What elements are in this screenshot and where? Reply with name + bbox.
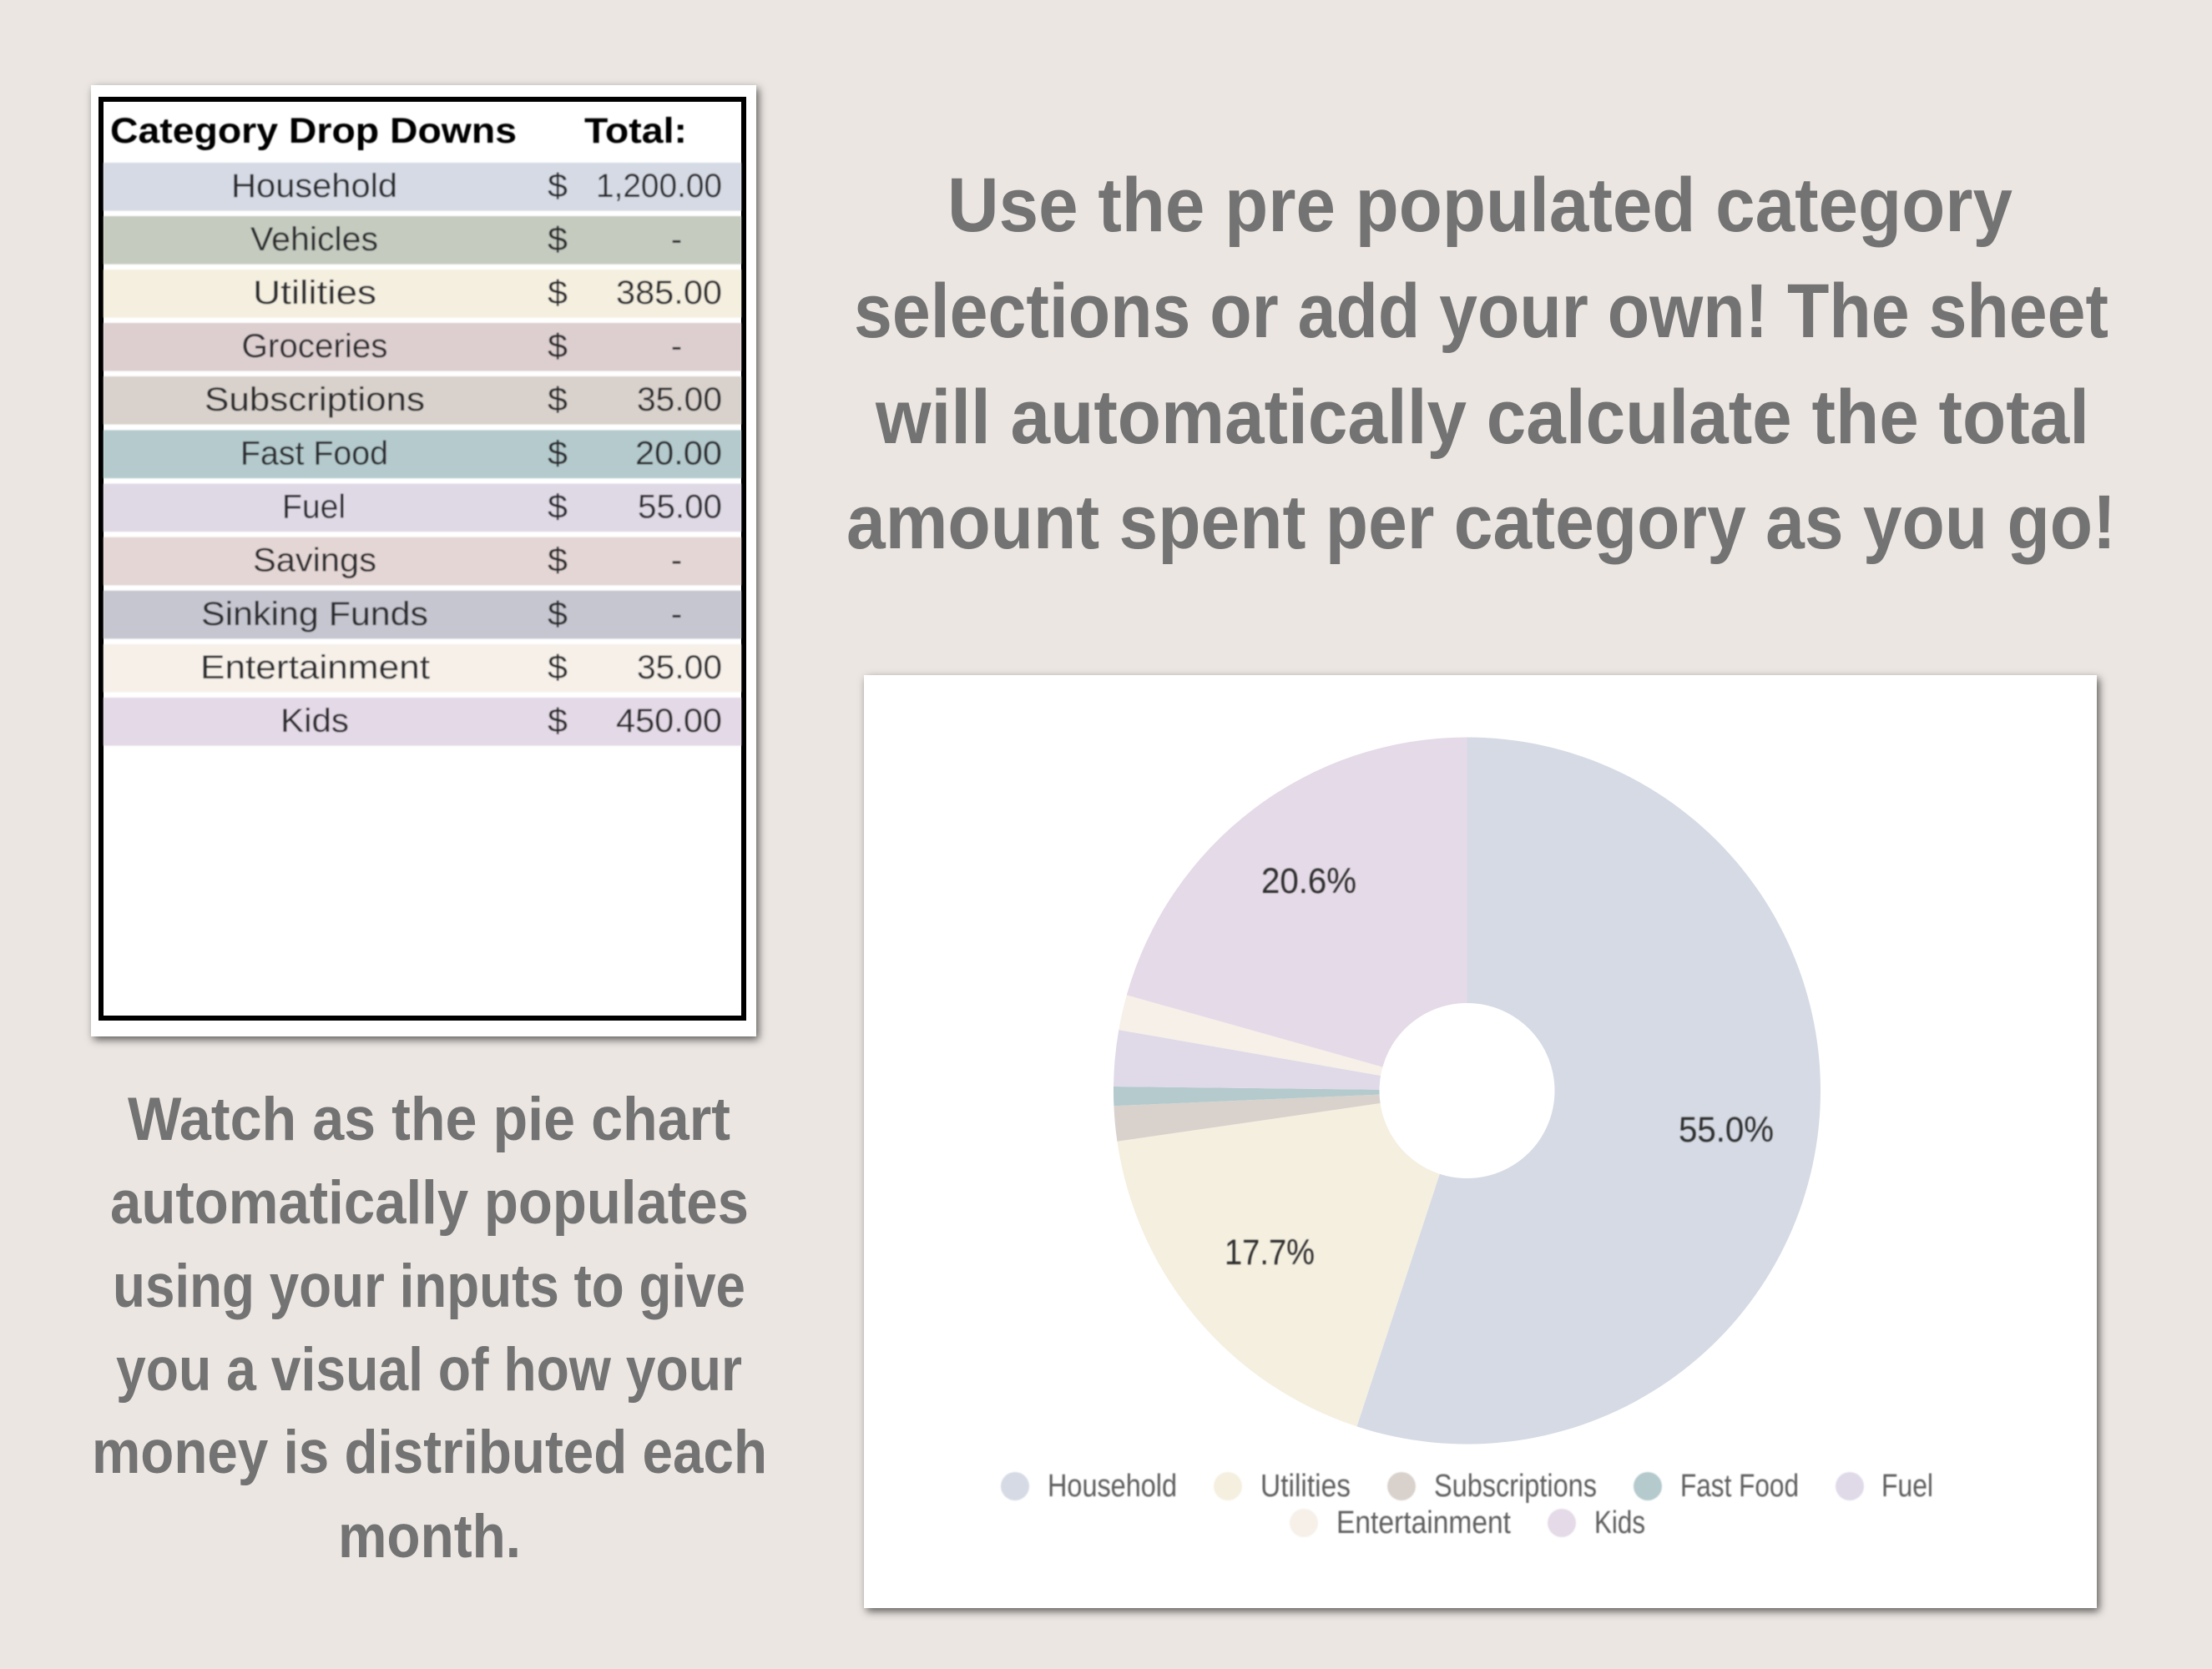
heading: pre populated categories text: will automatically calculate the total: [875, 375, 2089, 460]
row: Savings: [104, 537, 741, 585]
legend: Kids: [1548, 1505, 1645, 1540]
text block: pie chart description: you a visual of how your: [116, 1336, 742, 1404]
legend: Entertainment: Entertainment: [1336, 1505, 1511, 1540]
row: Vehicles: [104, 216, 741, 265]
row: Kids: $: [548, 703, 568, 739]
row: Entertainment: $: [548, 649, 568, 686]
chart legend: [1001, 1469, 1933, 1540]
row: Kids: [104, 698, 741, 746]
legend: Fast Food: [1634, 1469, 1799, 1504]
row: Sinking Funds: $: [548, 596, 568, 633]
row: Vehicles: Vehicles: [250, 221, 378, 258]
table card: [91, 85, 756, 1036]
legend: Household: [1001, 1469, 1177, 1504]
row: Fast Food: [104, 431, 741, 478]
table rows: [104, 111, 741, 746]
percentage labels: 17.7%: [1225, 1233, 1315, 1273]
heading: pre populated categories text: selections or add your own! The sheet: [854, 269, 2108, 354]
panel: category table: [91, 85, 756, 1036]
row: Entertainment: [104, 644, 741, 693]
row: Fuel: [104, 484, 741, 532]
row: Subscriptions: 35.00: [637, 381, 722, 418]
heading: pre populated categories text: amount spent per category as you go!: [846, 480, 2116, 565]
row: Household: $: [548, 168, 568, 204]
row: Household: 1,200.00: [596, 168, 722, 204]
row: Subscriptions: [104, 376, 741, 425]
slice: Utilities: [1117, 1091, 1467, 1426]
row: Utilities: 385.00: [616, 275, 722, 311]
legend: Fuel: Fuel: [1881, 1469, 1933, 1504]
table header: Category Drop Downs: [110, 111, 517, 151]
row: Savings: Savings: [253, 542, 376, 579]
percentage labels: [1225, 861, 1774, 1273]
table header: [110, 111, 687, 151]
row: Sinking Funds: -: [671, 596, 682, 633]
row: Groceries: Groceries: [242, 328, 387, 365]
text block: pie chart description: [92, 1086, 767, 1571]
percentage labels: 55.0%: [1679, 1110, 1774, 1150]
legend: Kids: Kids: [1594, 1505, 1645, 1540]
legend: Subscriptions: [1387, 1469, 1597, 1504]
legend: Fast Food: Fast Food: [1680, 1469, 1799, 1504]
row: Vehicles: -: [671, 221, 682, 258]
legend: Subscriptions: Subscriptions: [1434, 1469, 1597, 1504]
row: Groceries: [104, 323, 741, 371]
panel: pie chart: [864, 675, 2097, 1608]
row: Utilities: Utilities: [253, 275, 376, 311]
row: Utilities: $: [548, 275, 568, 311]
slice: Household: [1357, 738, 1821, 1445]
heading: pre populated categories text: [846, 163, 2116, 565]
text block: pie chart description: automatically populates: [110, 1169, 749, 1237]
row: Fuel: 55.00: [638, 489, 722, 526]
text block: pie chart description: using your inputs to give: [113, 1253, 745, 1320]
row: Entertainment: Entertainment: [200, 649, 430, 686]
row: Household: Household: [231, 168, 397, 204]
legend: Fuel: [1836, 1469, 1933, 1504]
percentage labels: 20.6%: [1261, 861, 1356, 901]
row: Groceries: $: [548, 328, 568, 365]
slice: Entertainment: [1119, 995, 1467, 1091]
row: Utilities: [104, 270, 741, 318]
slice: Kids: [1127, 738, 1467, 1091]
row: Fast Food: 20.00: [635, 436, 722, 472]
row: Fast Food: $: [548, 436, 568, 472]
row: Fast Food: Fast Food: [240, 436, 388, 472]
row: Vehicles: $: [548, 221, 568, 258]
legend: Utilities: Utilities: [1260, 1469, 1351, 1504]
text block: pie chart description: Watch as the pie chart: [128, 1086, 730, 1153]
row: Groceries: -: [671, 328, 682, 365]
text block: pie chart description: month.: [338, 1503, 521, 1571]
legend: Utilities: [1214, 1469, 1351, 1504]
row: Fuel: $: [548, 489, 568, 526]
text block: pie chart description: money is distributed each: [92, 1419, 767, 1486]
row: Sinking Funds: Sinking Funds: [201, 596, 428, 633]
table header: Total:: [584, 111, 687, 151]
row: Subscriptions: $: [548, 381, 568, 418]
donut hole: [1379, 1003, 1554, 1178]
slice: Fast Food: [1114, 1087, 1467, 1106]
heading: pre populated categories text: Use the pre populated category: [947, 163, 2013, 248]
chart card: [864, 675, 2097, 1608]
table black frame: [101, 99, 744, 1018]
row: Entertainment: 35.00: [637, 649, 722, 686]
row: Kids: Kids: [280, 703, 349, 739]
row: Subscriptions: Subscriptions: [205, 381, 425, 418]
row: Savings: -: [671, 542, 682, 579]
row: Household: [104, 163, 741, 211]
slice: Subscriptions: [1114, 1091, 1467, 1142]
row: Kids: 450.00: [616, 703, 722, 739]
row: Savings: $: [548, 542, 568, 579]
pie chart: [1114, 738, 1821, 1445]
row: Sinking Funds: [104, 591, 741, 638]
row: Fuel: Fuel: [282, 489, 346, 526]
legend: Household: Household: [1048, 1469, 1177, 1504]
slice: Fuel: [1114, 1030, 1467, 1091]
